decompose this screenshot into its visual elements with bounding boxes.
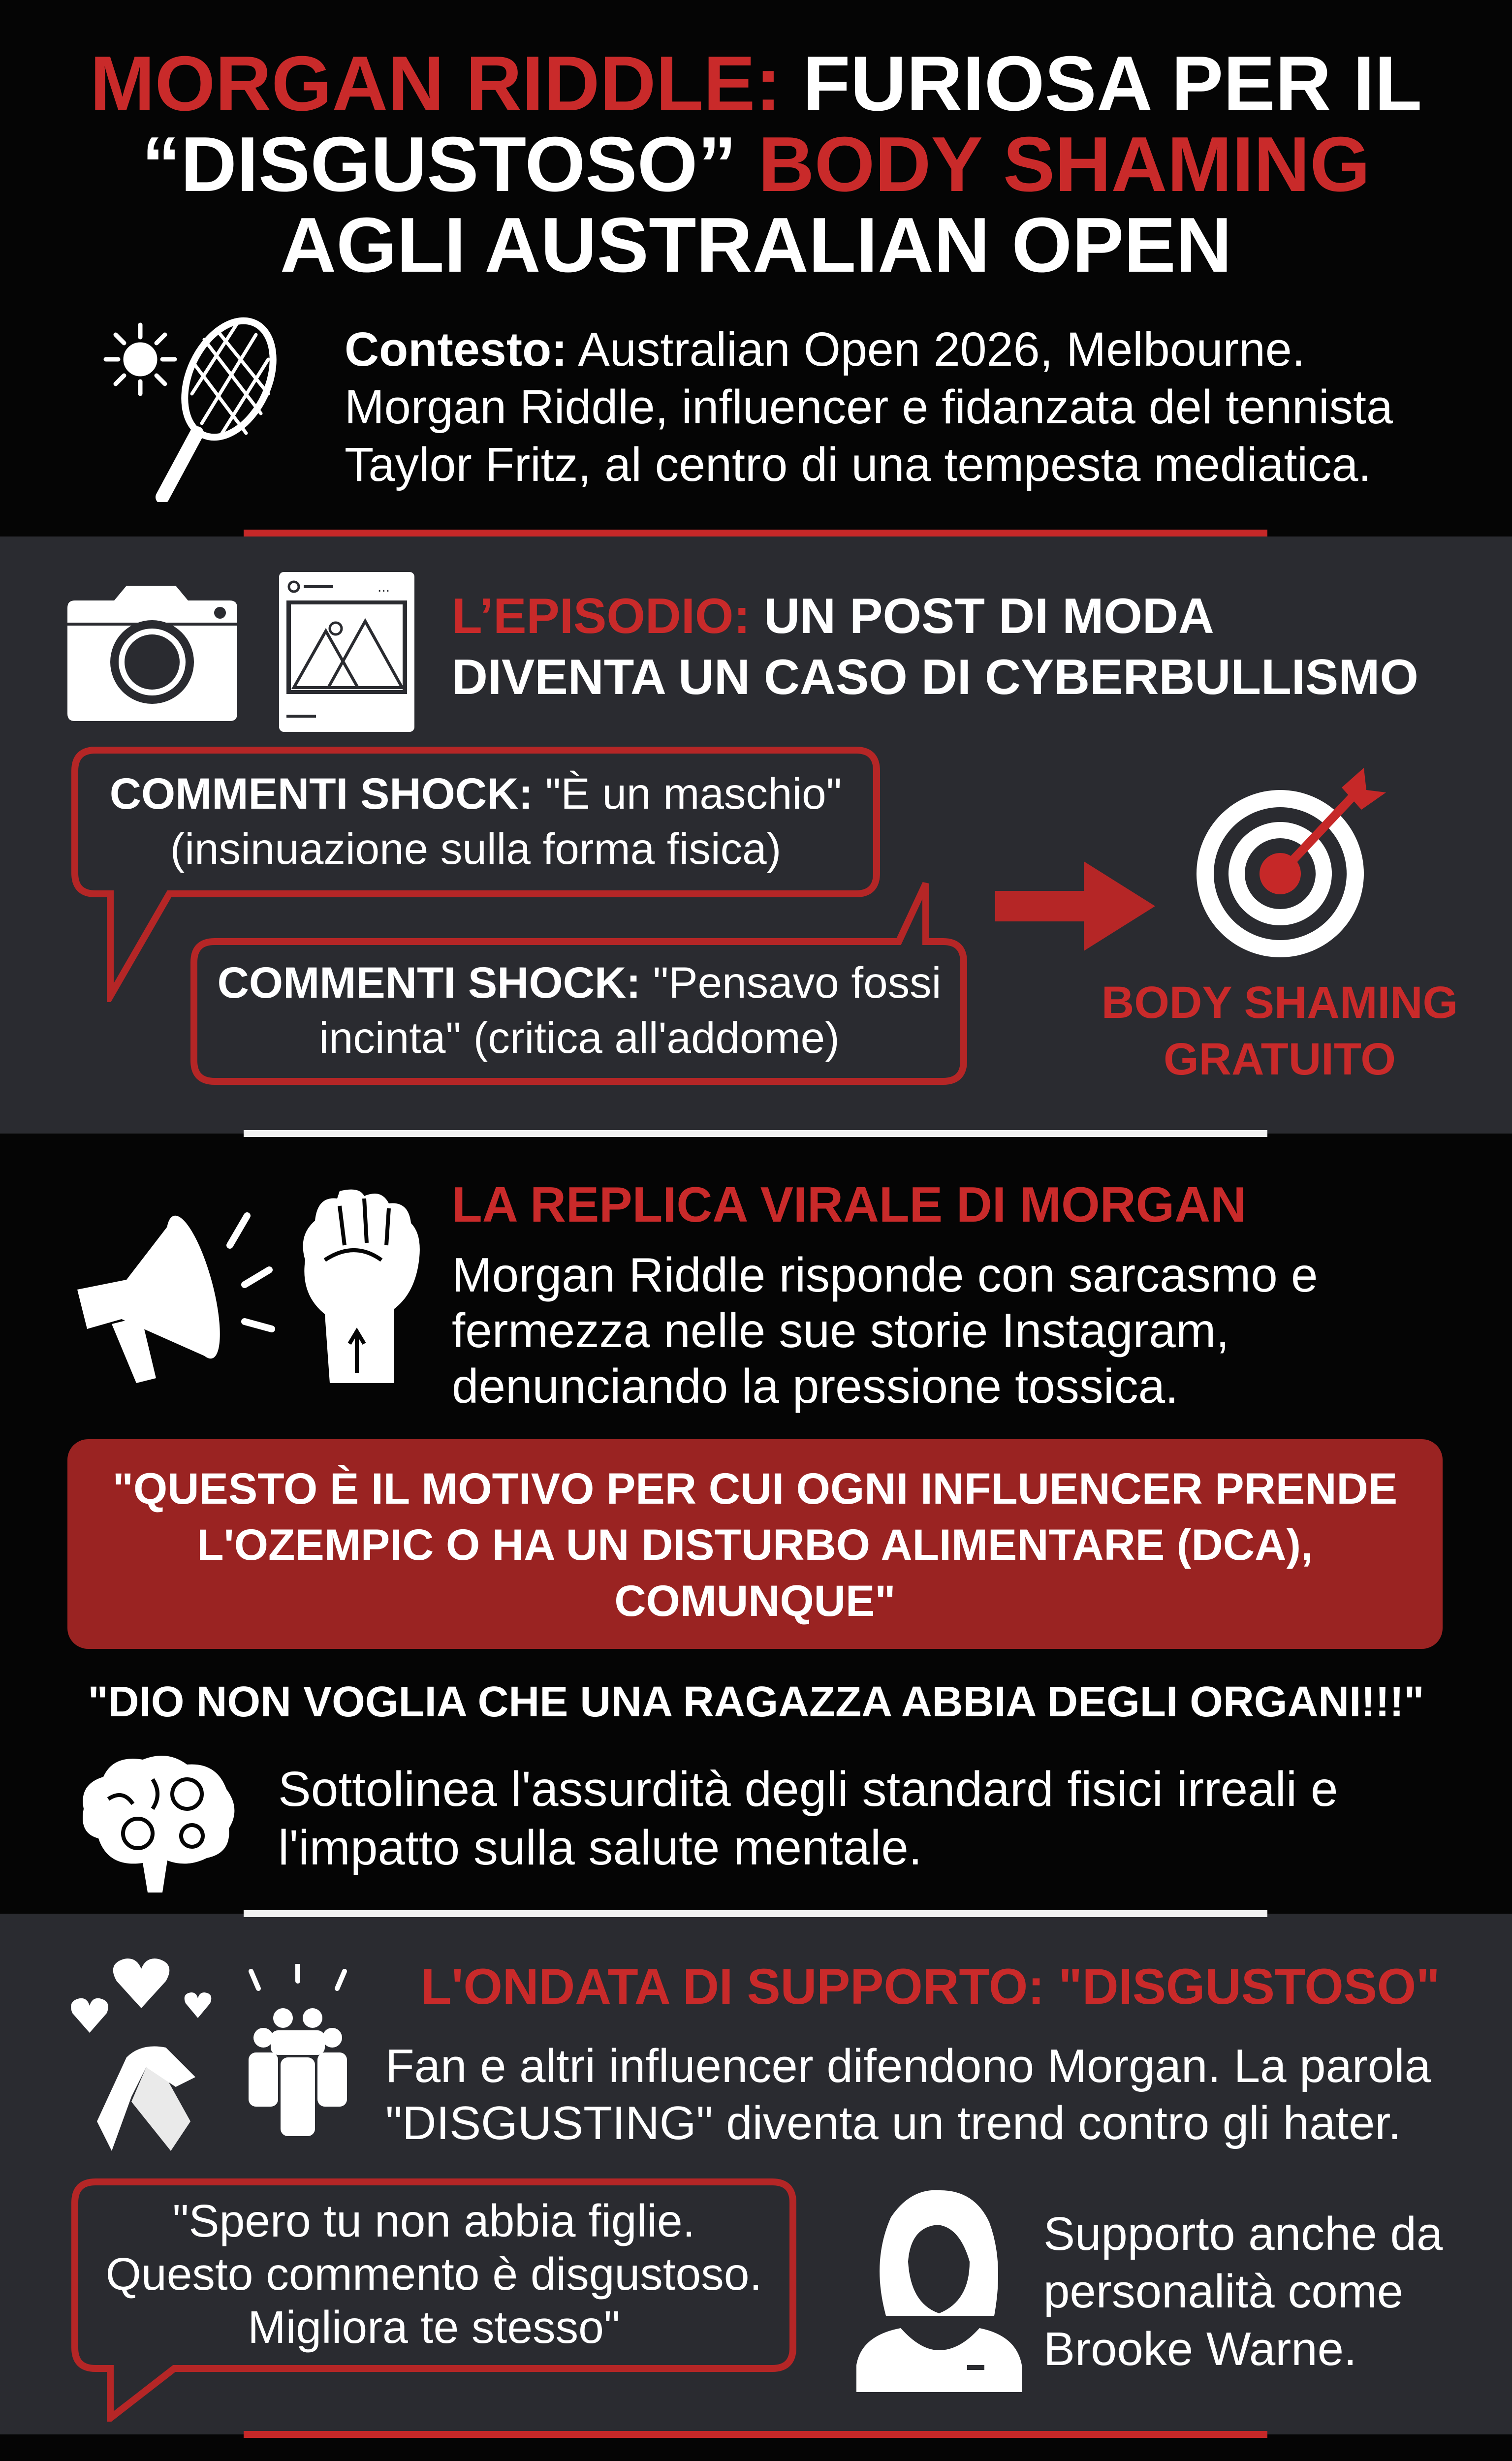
heading: replica: LA REPLICA VIRALE DI MORGAN (452, 1177, 1246, 1232)
text block: replica (452, 1248, 1318, 1413)
icon: camera (67, 586, 237, 721)
text block: brooke warne (1043, 2205, 1443, 2378)
label: body shaming gratuito: GRATUITO (1164, 1034, 1396, 1084)
text block: mental health (278, 1762, 1338, 1875)
text block: support: Fan e altri influencer difendono Morgan. La parola (385, 2040, 1431, 2092)
callout: comment 2: COMMENTI SHOCK: "Pensavo fossi (218, 958, 941, 1007)
callout: supporter comment: Migliora te stesso" (248, 2302, 620, 2353)
callout: comment 2: incinta" (critica all'addome) (319, 1013, 840, 1062)
icon: sun and tennis racket (103, 317, 277, 502)
title (90, 40, 1422, 288)
callout: comment 1: (insinuazione sulla forma fisica) (170, 824, 781, 873)
quote box: ozempic: "QUESTO È IL MOTIVO PER CUI OGNI INFLUENCER PRENDE (113, 1464, 1397, 1513)
callout: comment 1: COMMENTI SHOCK: "È un maschio" (110, 769, 842, 818)
title: MORGAN RIDDLE: FURIOSA PER IL (90, 40, 1422, 127)
callout: supporter comment: "Spero tu non abbia figlie. (173, 2195, 695, 2246)
quote box: ozempic: L'OZEMPIC O HA UN DISTURBO ALIMENTARE (DCA), (197, 1520, 1313, 1569)
icon: social post: ... (378, 579, 390, 595)
label: body shaming gratuito: BODY SHAMING (1102, 978, 1458, 1028)
text block: support (385, 2040, 1431, 2149)
arrow (995, 861, 1155, 951)
callout: supporter comment (71, 2178, 796, 2422)
icon: target (1197, 768, 1386, 957)
quote: organi: "DIO NON VOGLIA CHE UNA RAGAZZA ABBIA DEGLI ORGANI!!!" (88, 1678, 1424, 1726)
title: “DISGUSTOSO” BODY SHAMING (142, 121, 1370, 208)
divider white (244, 1130, 1267, 1137)
text block: replica: Morgan Riddle risponde con sarcasmo e (452, 1248, 1318, 1302)
callout: comment 2 (190, 882, 967, 1085)
text block: brooke warne: personalità come (1043, 2265, 1403, 2318)
divider red (244, 530, 1267, 536)
text block: replica: fermezza nelle sue storie Instagram, (452, 1303, 1229, 1357)
text block: replica: denunciando la pressione tossica. (452, 1359, 1178, 1413)
icon: crowd (249, 1964, 347, 2136)
title: AGLI AUSTRALIAN OPEN (280, 202, 1232, 288)
heading: episode: L’EPISODIO: UN POST DI MODA (452, 589, 1214, 644)
callout: comment 1 (71, 747, 880, 1002)
quote box: ozempic: COMUNQUE" (614, 1576, 896, 1625)
icon: social post (279, 572, 414, 732)
section background: support (0, 1914, 1512, 2434)
heading: support: L'ONDATA DI SUPPORTO: "DISGUSTOSO" (421, 1958, 1440, 2015)
icon: raised fist (303, 1189, 420, 1383)
divider red (244, 2431, 1267, 2438)
divider white (244, 1910, 1267, 1917)
label: body shaming gratuito (1102, 978, 1458, 1084)
icon: hearts and handshake (71, 1958, 212, 2151)
icon: megaphone (77, 1212, 275, 1383)
icon: woman (856, 2190, 1022, 2392)
heading: episode: DIVENTA UN CASO DI CYBERBULLISMO (452, 650, 1418, 705)
text block: mental health: Sottolinea l'assurdità degli standard fisici irreali e (278, 1762, 1338, 1817)
text block: context (345, 322, 1393, 491)
text block: context: Contesto: Australian Open 2026, Melbourne. (345, 322, 1305, 376)
section background: episode (0, 536, 1512, 1134)
text block: support: "DISGUSTING" diventa un trend contro gli hater. (385, 2097, 1401, 2149)
text block: brooke warne: Brooke Warne. (1043, 2323, 1357, 2375)
text block: brooke warne: Supporto anche da (1043, 2208, 1443, 2260)
quote box: ozempic (67, 1439, 1443, 1649)
text block: mental health: l'impatto sulla salute mentale. (278, 1820, 922, 1875)
text block: context: Morgan Riddle, influencer e fidanzata del tennista (345, 380, 1393, 434)
text block: context: Taylor Fritz, al centro di una tempesta mediatica. (345, 438, 1371, 491)
heading: episode (452, 589, 1418, 705)
icon: brain with gears (83, 1756, 234, 1893)
callout: supporter comment: Questo commento è disgustoso. (106, 2248, 762, 2300)
